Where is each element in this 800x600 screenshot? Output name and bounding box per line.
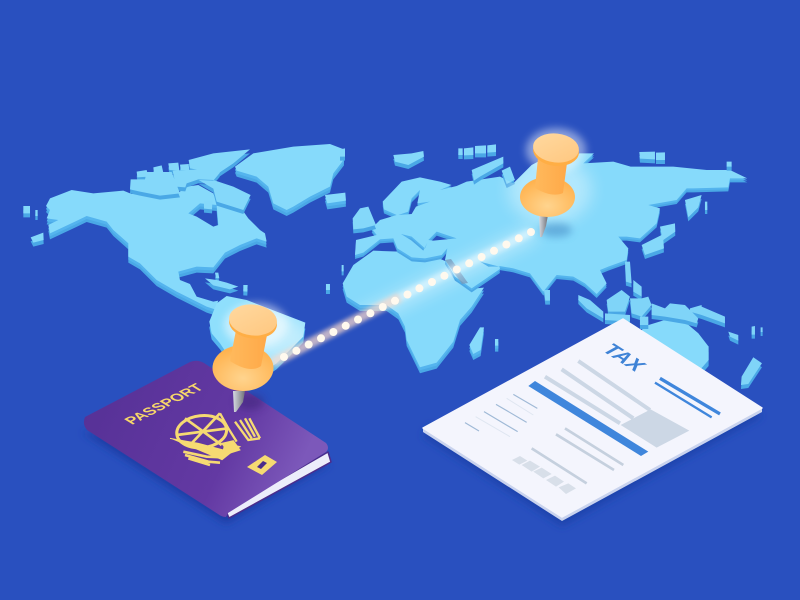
document content lines bbox=[465, 361, 720, 494]
passport globe emblem bbox=[170, 413, 260, 465]
map: Caribbean and Atlantic islands bbox=[23, 206, 344, 296]
map: Southeast Asia and Oceania islands bbox=[544, 262, 763, 389]
passport chip emblem bbox=[247, 455, 277, 475]
map: Australia bbox=[633, 317, 709, 393]
map: northern islands and Japan bbox=[340, 144, 732, 259]
pin: Asia bbox=[520, 128, 586, 237]
document shadow bbox=[423, 410, 762, 526]
document heading: TAX: TAX bbox=[597, 341, 651, 374]
pin base bbox=[520, 177, 575, 217]
map: Eurasia bbox=[355, 153, 747, 298]
map: South America bbox=[209, 296, 305, 389]
document paper edge bbox=[423, 408, 762, 521]
passport title: PASSPORT bbox=[121, 382, 208, 427]
map: Red Sea bbox=[445, 259, 468, 284]
dotted route between pins bbox=[272, 228, 535, 363]
pin head top bbox=[532, 131, 580, 165]
map: Greenland and Iceland bbox=[235, 144, 346, 216]
pin neck bbox=[535, 158, 567, 195]
passport cover bbox=[84, 361, 328, 517]
map: North America bbox=[46, 185, 267, 315]
pin glow bbox=[224, 303, 288, 347]
pin head side bbox=[228, 305, 278, 341]
tax document bbox=[423, 319, 762, 526]
map: land glow along route bbox=[243, 156, 592, 359]
pin shadow bbox=[236, 394, 264, 410]
document page bbox=[423, 319, 762, 517]
pin head side bbox=[532, 134, 580, 168]
passport pages bbox=[226, 452, 331, 518]
map: Arctic islands bbox=[130, 149, 251, 214]
pin needle bbox=[539, 215, 548, 237]
pin shadow bbox=[540, 223, 572, 237]
world map bbox=[23, 144, 763, 393]
pin glow bbox=[526, 128, 586, 172]
pin base bbox=[212, 345, 274, 391]
map: Africa bbox=[343, 251, 498, 373]
passport shadow bbox=[82, 432, 330, 524]
pin head top bbox=[228, 302, 278, 338]
pin needle bbox=[233, 391, 245, 412]
pin: South America bbox=[212, 302, 288, 412]
passport bbox=[82, 361, 331, 524]
pin neck bbox=[230, 325, 267, 369]
